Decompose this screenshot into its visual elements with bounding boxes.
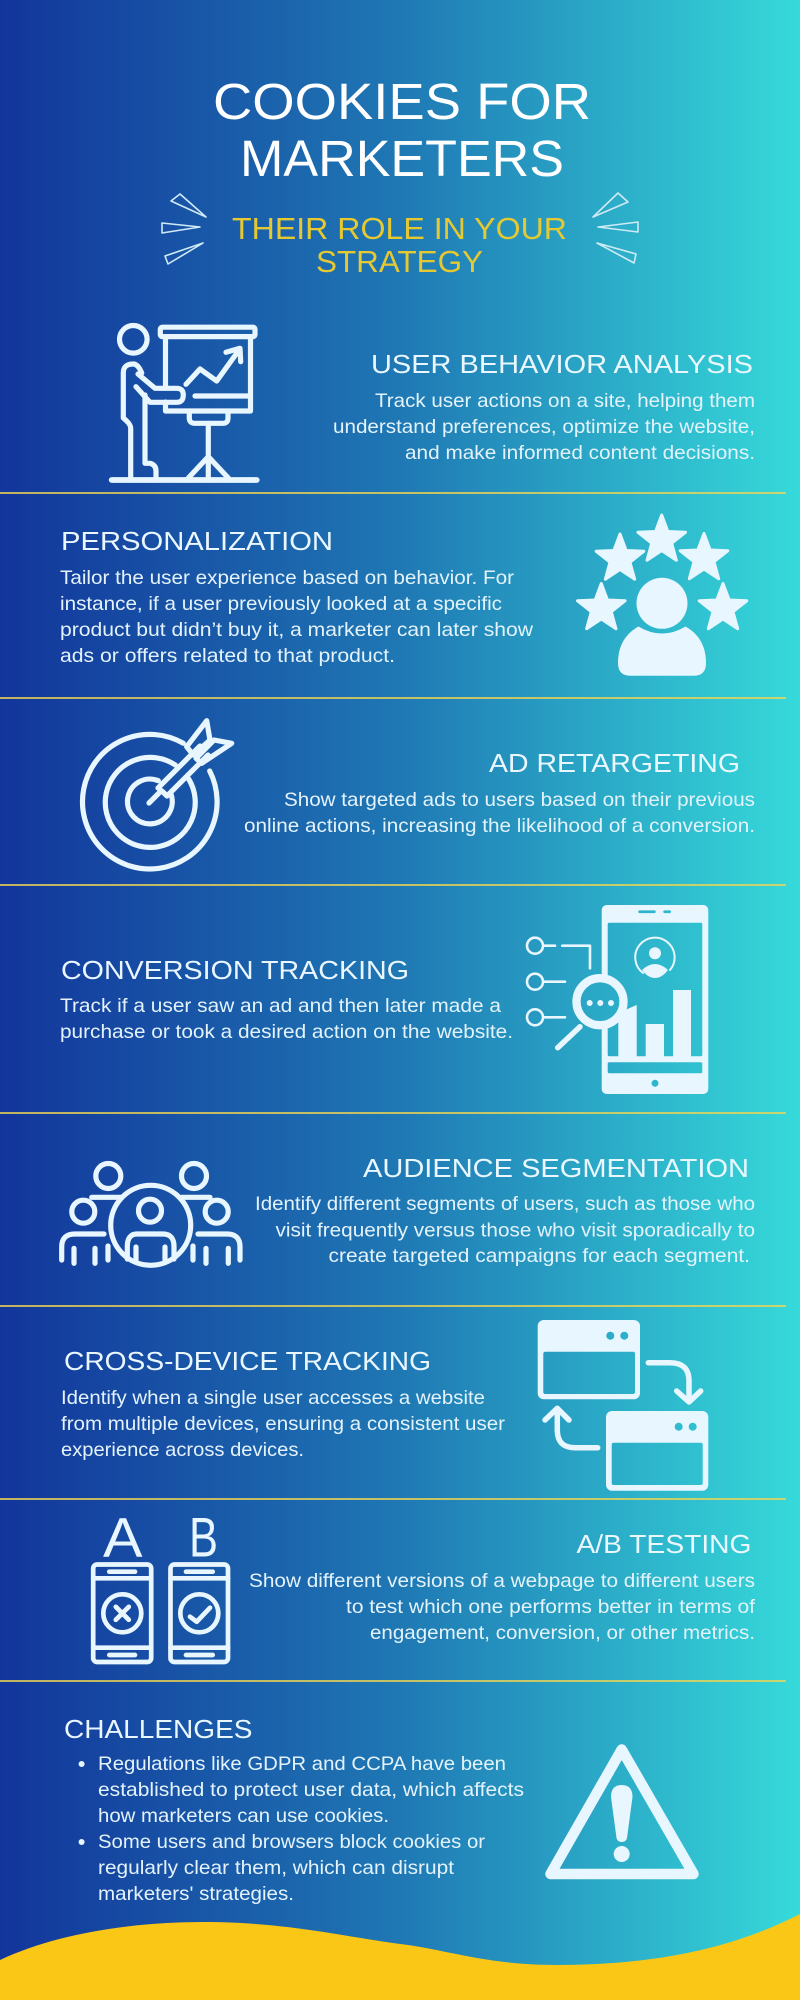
icon: user with stars (578, 515, 747, 676)
text block: from multiple devices, ensuring a consistent user (61, 1413, 506, 1435)
icon: two browser windows with arrows (538, 1320, 708, 1491)
text block (60, 995, 513, 1043)
icon: left burst (162, 194, 206, 264)
text block: Track user actions on a site, helping them (375, 390, 755, 412)
panel: a/b testing (93, 1506, 756, 1662)
panel: user behavior analysis (112, 326, 755, 480)
heading: CONVERSION TRACKING (61, 955, 409, 985)
text block: Show different versions of a webpage to different users (249, 1570, 755, 1592)
bullet list: established to protect user data, which affects (98, 1779, 524, 1801)
text block (244, 789, 755, 837)
yellow wave footer (0, 1914, 800, 2000)
text block: understand preferences, optimize the website, (333, 416, 755, 438)
panel: ad retargeting (82, 721, 755, 869)
icon: A/B phones (93, 1506, 228, 1662)
bullet list (79, 1753, 524, 1905)
subtitle: THEIR ROLE IN YOUR (232, 211, 567, 246)
text block (249, 1570, 756, 1644)
text block: Identify different segments of users, such as those who (255, 1193, 755, 1215)
text block: create targeted campaigns for each segment. (328, 1245, 750, 1267)
heading: PERSONALIZATION (61, 526, 333, 556)
icon: warning triangle (550, 1750, 694, 1874)
text block: experience across devices. (61, 1439, 304, 1461)
bullet list: how marketers can use cookies. (98, 1805, 389, 1827)
heading: USER BEHAVIOR ANALYSIS (371, 349, 753, 379)
text block (61, 1387, 506, 1461)
heading: CHALLENGES (64, 1714, 252, 1744)
subtitle: STRATEGY (316, 244, 483, 279)
heading: AD RETARGETING (489, 748, 740, 778)
text block: visit frequently versus those who visit sporadically to (276, 1220, 755, 1242)
bullet list: regularly clear them, which can disrupt (98, 1857, 455, 1879)
panel: challenges (64, 1714, 694, 1905)
icon: right burst (593, 193, 638, 263)
heading: CROSS-DEVICE TRACKING (64, 1346, 431, 1376)
text block (255, 1193, 755, 1267)
icon: phone with analytics and magnifier (527, 905, 708, 1094)
icon: presenter with chart (112, 326, 257, 480)
icon: target with arrow (82, 721, 232, 869)
panel: audience segmentation (62, 1153, 755, 1267)
title: MARKETERS (240, 130, 564, 187)
icon: audience group (62, 1164, 240, 1265)
text block: Track if a user saw an ad and then later made a (60, 995, 501, 1017)
text block: ads or offers related to that product. (60, 645, 395, 667)
heading: A/B TESTING (576, 1529, 752, 1559)
text block: product but didn’t buy it, a marketer can later show (60, 619, 534, 641)
text block: Show targeted ads to users based on their previous (284, 789, 755, 811)
bullet list: Regulations like GDPR and CCPA have been (98, 1753, 506, 1775)
text block: online actions, increasing the likelihood of a conversion. (244, 815, 755, 837)
text block: purchase or took a desired action on the website. (60, 1021, 513, 1043)
text block: and make informed content decisions. (405, 442, 755, 464)
icon: A/B phones: B (189, 1506, 218, 1568)
text block: Tailor the user experience based on behavior. For (60, 567, 515, 589)
subtitle (232, 211, 567, 279)
bullet list: Some users and browsers block cookies or (98, 1831, 486, 1853)
text block: engagement, conversion, or other metrics. (370, 1622, 755, 1644)
text block: instance, if a user previously looked at a specific (60, 593, 502, 615)
panel: cross-device tracking (61, 1320, 708, 1491)
panel: personalization (60, 515, 747, 676)
text block (333, 390, 755, 464)
heading: AUDIENCE SEGMENTATION (363, 1153, 749, 1183)
icon: A/B phones: A (103, 1506, 143, 1568)
text block: Identify when a single user accesses a website (61, 1387, 485, 1409)
title (213, 73, 591, 187)
panel: conversion tracking (60, 905, 708, 1094)
bullet list: marketers' strategies. (98, 1883, 294, 1905)
title: COOKIES FOR (213, 73, 591, 130)
text block: to test which one performs better in terms of (346, 1596, 756, 1618)
text block (60, 567, 534, 667)
